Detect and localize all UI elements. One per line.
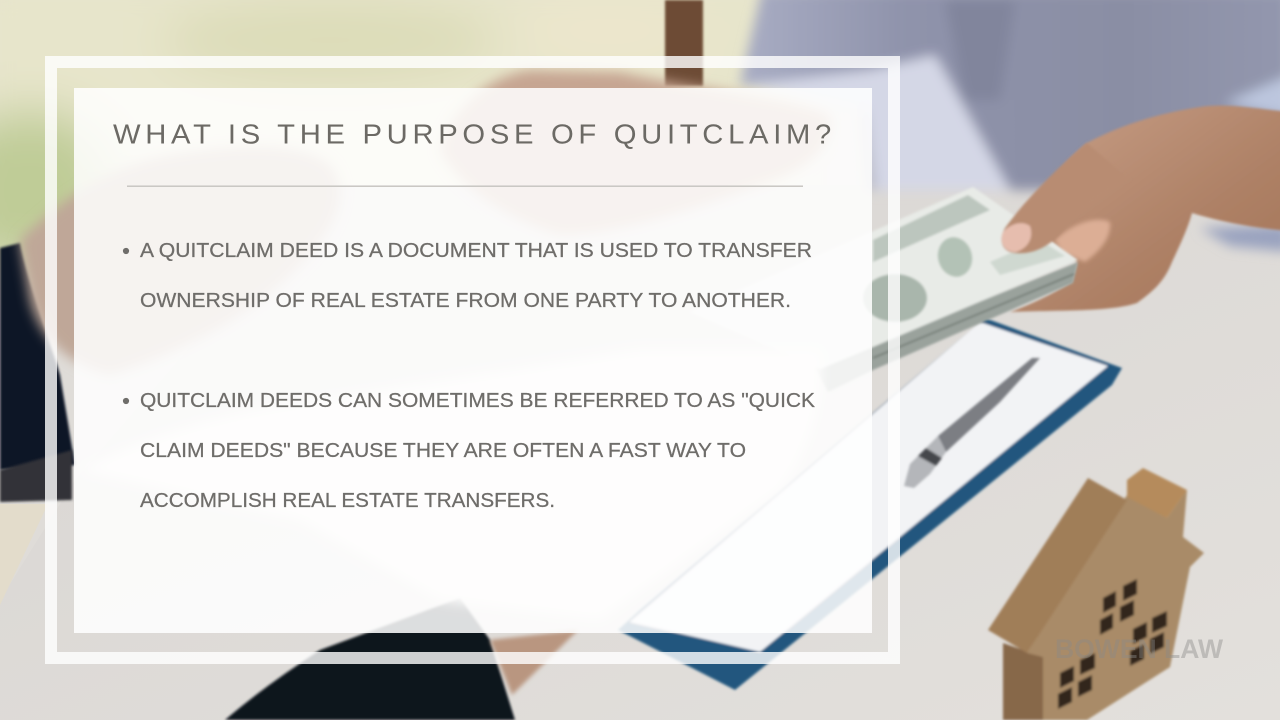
bullet one: OWNERSHIP OF REAL ESTATE FROM ONE PARTY TO ANOTHER. — [140, 290, 791, 312]
table surface — [0, 185, 1280, 720]
watermark: BOWEN LAW — [1055, 634, 1224, 664]
panel: translucent white content card — [74, 88, 872, 633]
person in shirt — [740, 0, 1280, 252]
wooden post — [665, 0, 703, 86]
thumb — [1002, 143, 1130, 253]
bottom dark sleeve — [225, 598, 515, 720]
bullet two: ACCOMPLISH REAL ESTATE TRANSFERS. — [140, 490, 555, 512]
right hand — [1010, 106, 1280, 312]
left lower tabletop edge — [0, 450, 72, 502]
outer white frame — [51, 62, 894, 658]
person on left: dark sleeve — [0, 243, 75, 470]
bullet one: A QUITCLAIM DEED IS A DOCUMENT THAT IS USED TO TRANSFER — [140, 240, 812, 262]
divider — [127, 186, 803, 187]
bullet one — [123, 240, 812, 312]
window backdrop — [0, 0, 800, 280]
title: WHAT IS THE PURPOSE OF QUITCLAIM? — [113, 118, 836, 150]
left hand — [20, 147, 340, 375]
bullet two — [123, 390, 816, 512]
top centre hand — [440, 70, 831, 235]
pen — [904, 358, 1040, 488]
wooden house model — [988, 468, 1204, 720]
palm highlight — [1055, 220, 1110, 262]
stack of dollar bills — [690, 187, 1078, 392]
centre hand — [80, 350, 821, 620]
bullet two: QUITCLAIM DEEDS CAN SOMETIMES BE REFERRED TO AS "QUICK — [140, 390, 816, 412]
bullet two: CLAIM DEEDS" BECAUSE THEY ARE OFTEN A FAST WAY TO — [140, 440, 746, 462]
clipboard — [618, 318, 1122, 690]
